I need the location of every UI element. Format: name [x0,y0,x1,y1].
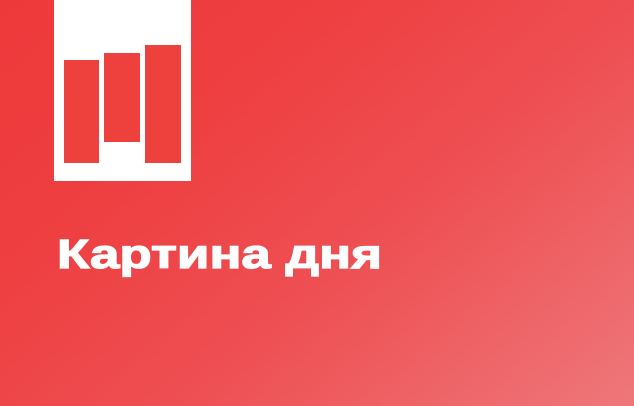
title: Картина дня [57,231,382,277]
icon: logo [54,0,191,181]
